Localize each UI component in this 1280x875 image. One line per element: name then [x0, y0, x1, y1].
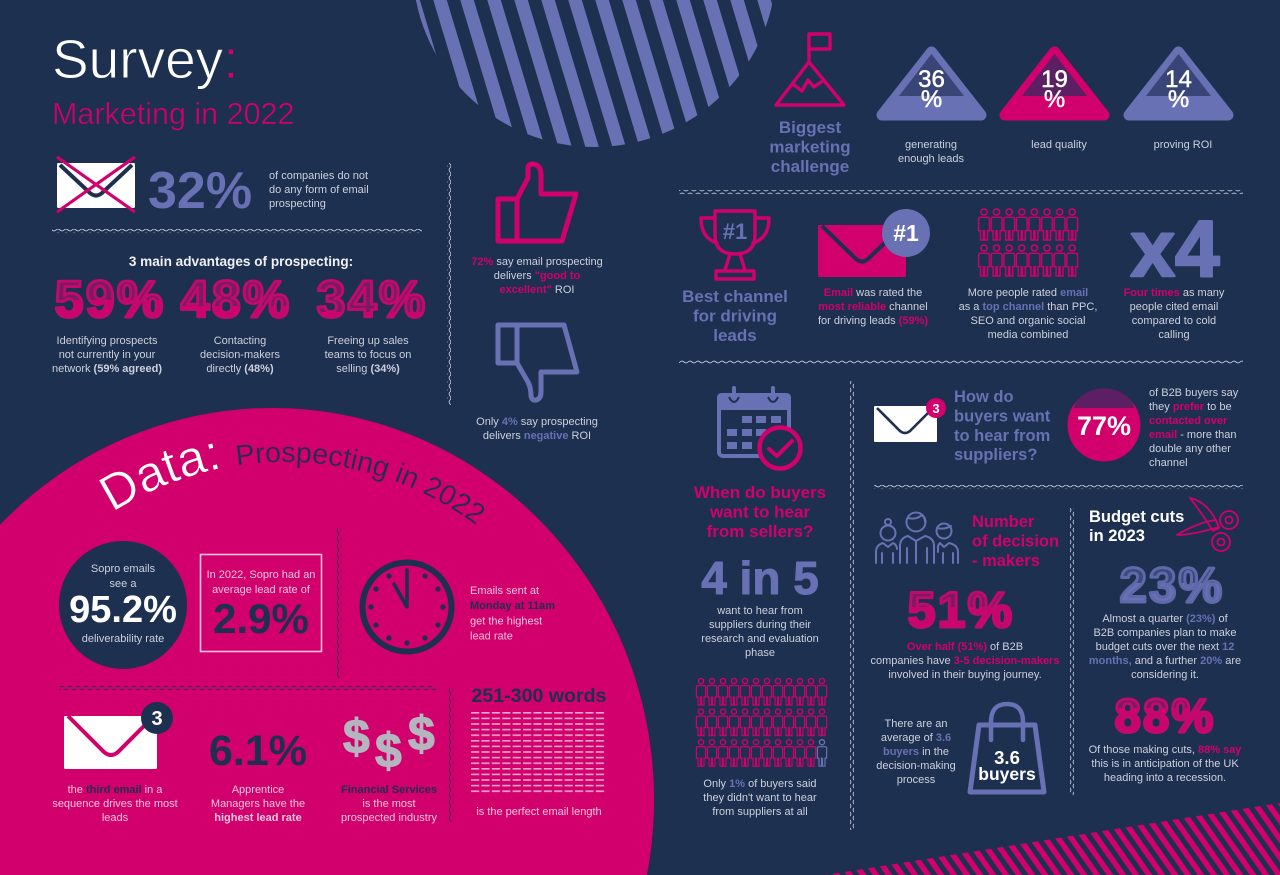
heading: suppliers? [954, 446, 1037, 464]
icon: mountain with flag [776, 34, 844, 105]
text: Monday at 11am: get the highest [470, 615, 542, 627]
heading: Number [972, 513, 1034, 531]
heading: When do buyers [694, 483, 826, 502]
text: companies without email prospecting: prospecting [269, 198, 326, 210]
heading: of decision [972, 532, 1059, 550]
stat box: 2.9% lead rate: In 2022, Sopro had an [207, 569, 315, 581]
text: want to hear from suppliers: phase [745, 647, 775, 659]
heading: to hear from [954, 427, 1050, 445]
text: recession: this is in anticipation of the UK [1091, 758, 1239, 770]
stat circle: 77% [1068, 388, 1140, 462]
text: almost a quarter: budget cuts over the next [1096, 641, 1222, 653]
panel: best channel for driving leads [682, 204, 1225, 345]
icon: envelope #1 [818, 209, 930, 277]
text: third email: sequence drives the most [52, 798, 178, 810]
icon: 36 people, one highlighted [696, 678, 828, 769]
text: four times: calling [1158, 329, 1190, 341]
text: over half: 3-5 decision-makers [954, 655, 1059, 667]
stat circle: 77%: 77% [1077, 411, 1131, 441]
text: Monday at 11am: lead rate [470, 631, 513, 643]
text: identifying prospects: Identifying prospects [57, 335, 157, 347]
icon: shopping bag 3.6 buyers: 3.6 [994, 747, 1020, 768]
panel: 32% no email prospecting [57, 157, 369, 220]
labels: challenges: enough leads [898, 153, 965, 165]
text: top channel: top channel than PPC, [982, 301, 1097, 313]
stat: 6.1% Apprentice Managers: 6.1% [209, 727, 307, 775]
heading: for driving [693, 306, 777, 326]
labels: challenges [898, 139, 1212, 165]
text: average of 3.6 buyers: in the [922, 746, 949, 758]
icon: crossed-out envelope [57, 157, 135, 212]
text: almost a quarter: Almost a quarter (23%) of [1102, 613, 1228, 625]
text: top channel: as a [959, 301, 982, 313]
triangle: 19%: 19 [1041, 66, 1068, 93]
text: prefer email: - more than [1180, 429, 1236, 441]
icon: three people [876, 512, 958, 563]
text: top channel: More people rated email [968, 287, 1088, 299]
text: freeing up sales teams: (34%) [370, 363, 400, 375]
text: prefer email: double any other [1149, 443, 1231, 455]
text: average of 3.6 buyers: 3.6 [936, 732, 951, 744]
pink circle background for data section [0, 408, 654, 875]
heading: leads [713, 326, 757, 345]
text: freeing up sales teams: Freeing up sales [327, 335, 409, 347]
panel: Data prospecting in 2022 [52, 443, 607, 824]
text: only 1%: they didn't want to hear [703, 792, 817, 804]
text: contacting decision-makers: Contacting [214, 335, 266, 347]
text: over half: companies have [871, 655, 954, 667]
text: want to hear from suppliers: suppliers during their [709, 619, 811, 631]
triangle: 14%: % [1168, 86, 1189, 113]
text: contacting decision-makers: decision-makers [200, 349, 281, 361]
triangle: 19% [1005, 52, 1104, 115]
text: only 1%: from suppliers at all [712, 806, 808, 818]
triangle: 36% [882, 52, 981, 115]
triangle: 14% [1129, 52, 1228, 115]
text: recession: Of those making cuts, 88% say [1089, 744, 1241, 756]
icon: trophy: #1 [723, 219, 747, 244]
decorative striped semicircle, top [410, 0, 780, 150]
text: four times: Four times as many [1124, 287, 1224, 299]
stat: 251-300 words: 251-300 words [471, 685, 607, 707]
text: prefer email: contacted over [1149, 415, 1228, 427]
text: 4% negative: negative ROI [524, 430, 591, 442]
text: Monday at 11am: Monday at 11am [470, 600, 555, 612]
stat circle: deliverability 95.2%: 95.2% [69, 589, 177, 631]
heading: Best channel [682, 287, 788, 306]
text: freeing up sales teams: selling [336, 363, 370, 375]
stat: Financial Services: Financial Services [341, 784, 437, 796]
text: companies without email prospecting: do any form of email [269, 184, 369, 196]
text: four times: compared to cold [1132, 315, 1216, 327]
icon: trophy [701, 211, 769, 279]
text: third email: the third email in a [68, 784, 162, 796]
panel: budget cuts in 2023 [1089, 498, 1242, 784]
stat box: 2.9% lead rate: 2.9% [213, 595, 309, 642]
text: almost a quarter: 12 [1222, 641, 1234, 653]
text: companies without email prospecting: of companies do not [269, 170, 368, 182]
heading: marketing [769, 138, 851, 156]
text: want to hear from suppliers: want to hear from [717, 605, 803, 617]
panel: biggest marketing challenge [769, 34, 1228, 176]
text: identifying prospects: not currently in your [59, 349, 156, 361]
icon: dollar signs: $ [343, 711, 370, 764]
text: average of 3.6 buyers: decision-making [876, 760, 956, 772]
chart: lines of text blocks [471, 712, 606, 796]
text: contacting decision-makers: (48%) [244, 363, 274, 375]
text: prefer email: email [1149, 429, 1177, 441]
text: over half: involved in their buying journey. [888, 669, 1042, 681]
text: 72% good to excellent: 72% say email prospecting [471, 256, 603, 268]
text: prefer email: of B2B buyers say [1149, 387, 1238, 399]
stat: 48%: 48% [181, 271, 291, 329]
text: most reliable channel: Email was rated the [824, 287, 922, 299]
text: most reliable channel: channel [889, 301, 928, 313]
icon: envelope with badge 3: 3 [151, 708, 163, 730]
icon: clock at 11am [362, 562, 452, 652]
heading: challenge [771, 157, 849, 176]
heading: Budget cuts [1089, 508, 1184, 526]
text: average of 3.6 buyers: buyers [883, 746, 919, 758]
text: most reliable channel: (59%) [899, 315, 928, 327]
text: almost a quarter: months, [1089, 655, 1132, 667]
text: prefer email: channel [1149, 457, 1188, 469]
text: almost a quarter: B2B companies plan to make [1093, 627, 1237, 639]
labels: challenges: lead quality [1031, 139, 1087, 151]
triangle: 14%: 14 [1165, 66, 1192, 93]
stat: 251-300 words: is the perfect email length [476, 806, 602, 818]
subtitle: Prospecting in 2022: Prospecting in 2022 [236, 444, 484, 524]
stat: third email [52, 702, 178, 824]
stat circle: deliverability 95.2% [59, 541, 187, 669]
stat: 34%: 34% [317, 271, 427, 329]
text: recession: heading into a recession. [1104, 772, 1226, 784]
text: 4% negative: delivers [483, 430, 524, 442]
icon: thumbs up [498, 164, 576, 241]
stat: 88%: 88% [1115, 689, 1215, 742]
heading: in 2023 [1089, 527, 1145, 545]
stat: 59%: 59% [55, 271, 165, 329]
text: 72% good to excellent: excellent" [500, 284, 552, 296]
panel: 3 main advantages of prospecting [52, 254, 427, 375]
text: average of 3.6 buyers: There are an [885, 718, 947, 730]
icon: thumbs down [498, 325, 577, 400]
text: four times: people cited email [1130, 301, 1218, 313]
heading: 3 main advantages of prospecting: [129, 254, 353, 269]
icon: dollar signs: $ [408, 708, 435, 761]
heading: buyers want [954, 407, 1051, 425]
stat circle: deliverability 95.2%: Sopro emails [91, 563, 155, 575]
text: Monday at 11am: Emails sent at [470, 585, 539, 597]
text: most reliable channel: for driving leads [818, 315, 899, 327]
text: over half: Over half (51%) of B2B [907, 641, 1023, 653]
text: only 1%: Only 1% of buyers said [703, 778, 817, 790]
text: average of 3.6 buyers: average of [881, 732, 936, 744]
icon: white envelope with badge [874, 398, 946, 442]
stat: Financial Services: is the most [362, 798, 416, 810]
heading: - makers [972, 552, 1040, 570]
triangle: 36%: 36 [918, 66, 945, 93]
text: almost a quarter: and a further 20% are [1135, 655, 1241, 667]
labels: challenges: generating [905, 139, 957, 151]
stat: 6.1% Apprentice Managers [209, 727, 307, 824]
title: Survey: Survey: [52, 28, 238, 90]
panel: number of decision-makers [871, 512, 1059, 792]
stat: 4 in 5: 4 in 5 [701, 552, 819, 604]
stat: 6.1% Apprentice Managers: Apprentice [232, 784, 284, 796]
icon: white envelope with badge: 3 [932, 401, 940, 416]
panel: when do buyers want to hear [694, 388, 828, 818]
title: Data: Data: [99, 443, 218, 510]
stat: 6.1% Apprentice Managers: highest lead rate [214, 812, 302, 824]
stat box: 2.9% lead rate: average lead rate of [212, 584, 311, 596]
stat: Financial Services: prospected industry [341, 812, 437, 824]
stat: 51%: 51% [908, 582, 1014, 638]
stat: 32%: 32% [148, 162, 252, 220]
stat circle: deliverability 95.2%: see a [110, 578, 137, 590]
text: third email: leads [102, 812, 129, 824]
icon: envelope #1: #1 [893, 220, 919, 246]
panel: how do buyers want to hear [874, 387, 1239, 469]
text: top channel: media combined [988, 329, 1068, 341]
stat box: 2.9% lead rate [200, 554, 322, 652]
triangle: 36%: % [921, 86, 942, 113]
stat: 251-300 words [471, 685, 607, 818]
icon: shopping bag 3.6 buyers [970, 704, 1044, 792]
text: want to hear from suppliers: research and evaluation [701, 633, 819, 645]
text: 72% good to excellent: delivers [494, 270, 535, 282]
text: contacting decision-makers: directly [206, 363, 244, 375]
icon: scissors [1177, 498, 1238, 551]
icon: crowd of people [978, 208, 1078, 280]
stat circle: deliverability 95.2%: deliverability rate [82, 633, 164, 645]
heading: Biggest [779, 118, 841, 137]
text: 4% negative: Only 4% say prospecting [476, 416, 598, 428]
text: prefer email: prefer to be [1173, 401, 1232, 413]
stat: 6.1% Apprentice Managers: Managers have the [211, 798, 305, 810]
heading: How do [954, 388, 1014, 406]
text: freeing up sales teams: teams to focus on [325, 349, 411, 361]
text: prefer email: they [1149, 401, 1173, 413]
stat: x4: x4 [1131, 204, 1220, 293]
text: identifying prospects: (59% agreed) [94, 363, 162, 375]
stat: 23%: 23% [1120, 559, 1224, 613]
heading: want to hear [709, 502, 810, 522]
icon: calendar with check [717, 388, 800, 468]
labels: challenges: proving ROI [1154, 139, 1212, 151]
icon: dollar signs [343, 708, 435, 778]
decorative stripes, bottom right [825, 803, 1280, 875]
panel: ROI thumbs [471, 164, 603, 442]
text: top channel: SEO and organic social [971, 315, 1085, 327]
text: identifying prospects: network [52, 363, 94, 375]
subtitle: Marketing in 2022: Marketing in 2022 [52, 97, 294, 131]
text: average of 3.6 buyers: process [897, 774, 936, 786]
triangle: 19%: % [1044, 86, 1065, 113]
icon: shopping bag 3.6 buyers: buyers [978, 764, 1036, 784]
icon: dollar signs: $ [375, 725, 402, 778]
stat: Financial Services [341, 708, 437, 824]
heading: from sellers? [707, 522, 813, 541]
text: 72% good to excellent: ROI [555, 284, 574, 296]
text: most reliable channel: most reliable [818, 301, 886, 313]
text: 72% good to excellent: "good to [535, 270, 581, 282]
text: almost a quarter: considering it. [1131, 669, 1199, 681]
